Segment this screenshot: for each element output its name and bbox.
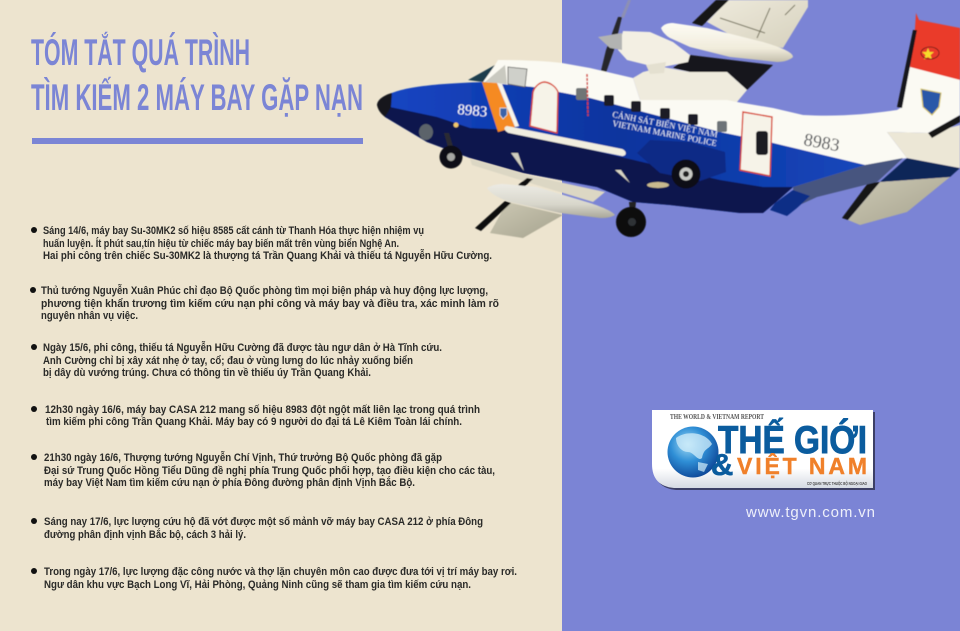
item: 17/6 divers deployed bbox=[31, 566, 517, 591]
background: blue panel bbox=[562, 0, 960, 631]
item: 15/6 pilot rescued bbox=[31, 341, 442, 379]
item: 17/6 divers deployed: Ngư dân khu vực Bạch Long Vĩ, Hải Phòng, Quảng Ninh cũng sẽ tham gia tìm kiếm cứu nạn. bbox=[44, 579, 471, 591]
item: 17/6 divers deployed: Trong ngày 17/6, lực lượng đặc công nước và thợ lặn chuyên môn cao được đưa tới vị trí máy bay rơi. bbox=[44, 566, 517, 578]
logo tagline: THE WORLD & VIETNAM REPORT bbox=[670, 414, 764, 421]
logo ampersand: & bbox=[711, 447, 733, 482]
orange nose stripe bbox=[482, 82, 519, 132]
item: 16/6 cooperation request bbox=[31, 451, 495, 489]
near wing fuel pod bbox=[487, 184, 615, 218]
item: 14/6 crash: huấn luyện. Ít phút sau,tín hiệu từ chiếc máy bay biến mất trên vùng biển Nghệ An. bbox=[43, 237, 399, 250]
cabin windows bbox=[576, 88, 727, 132]
tailplane lower bbox=[842, 177, 950, 225]
item: 17/6 wreckage found: Sáng nay 17/6, lực lượng cứu hộ đã vớt được một số mảnh vỡ máy bay CASA 212 ở phía Đông bbox=[44, 516, 483, 528]
fuselage lettering: VIETNAM MARINE POLICE bbox=[612, 118, 718, 148]
fuselage navy belly bbox=[385, 107, 793, 213]
fuselage blue body bbox=[377, 82, 865, 213]
item: Prime Minister directive: Thủ tướng Nguyễn Xuân Phúc chỉ đạo Bộ Quốc phòng tìm mọi biện pháp và huy động lực lượng, bbox=[41, 284, 488, 297]
item: 14/6 crash bbox=[31, 225, 492, 262]
front door bbox=[530, 82, 558, 133]
item: 16/6 cooperation request: Đại sứ Trung Quốc Hồng Tiểu Dũng đề nghị phía Trung Quốc phối hợp, tạo điều kiện cho các tàu, bbox=[44, 465, 495, 477]
logo small print: CƠ QUAN TRỰC THUỘC BỘ NGOẠI GIAO bbox=[807, 481, 867, 486]
rear gear wheel bbox=[616, 202, 646, 237]
main wheel bbox=[672, 160, 700, 188]
belly details bbox=[419, 122, 669, 188]
item: 16/6 CASA 212 lost bbox=[31, 404, 480, 428]
item: 16/6 CASA 212 lost: 12h30 ngày 16/6, máy bay CASA 212 mang số hiệu 8983 đột ngột mất liên lạc trong quá trình bbox=[45, 404, 480, 416]
near wing strip bbox=[470, 159, 605, 202]
timeline text block bbox=[30, 225, 517, 591]
rear underside bbox=[770, 158, 960, 216]
item: Prime Minister directive: phương tiện khẩn trương tìm kiếm cứu nạn phi công và máy bay và điều tra, xác minh làm rõ bbox=[41, 298, 499, 310]
rear door bbox=[740, 112, 772, 176]
title bbox=[31, 31, 363, 118]
photo: coast guard aircraft 8983 bbox=[377, 0, 960, 238]
item: Prime Minister directive bbox=[30, 284, 499, 322]
item: 15/6 pilot rescued: Anh Cường chỉ bị xây xát nhẹ ở tay, cổ; đau ở vùng lưng do lúc nhảy xuống biển bbox=[43, 355, 413, 367]
nose number 8983: 8983 bbox=[457, 102, 488, 121]
item: 16/6 cooperation request: máy bay Việt Nam tìm kiếm cứu nạn ở phía Đông đường phân định Vịnh Bắc Bộ. bbox=[44, 476, 415, 489]
far wing bbox=[633, 0, 808, 102]
title: TÓM TẮT QUÁ TRÌNH bbox=[31, 31, 250, 73]
logo plate bbox=[654, 412, 875, 490]
item: 15/6 pilot rescued: Ngày 15/6, phi công, thiếu tá Nguyễn Hữu Cường đã được tàu ngư dân ở Hà Tĩnh cứu. bbox=[43, 341, 442, 354]
red mast line bbox=[587, 74, 588, 116]
logo name: VIỆT NAM: VIỆT NAM bbox=[737, 452, 867, 479]
item: 17/6 wreckage found bbox=[31, 516, 483, 541]
item: 16/6 cooperation request: 21h30 ngày 16/6, Thượng tướng Nguyễn Chí Vịnh, Thứ trưởng Bộ Quốc phòng đã gặp bbox=[44, 451, 442, 464]
background: beige panel bbox=[0, 0, 562, 631]
nose wheel bbox=[440, 133, 462, 168]
title underline bar bbox=[32, 138, 363, 144]
near wing bbox=[475, 178, 563, 238]
logo: Thế Giới & Việt Nam bbox=[652, 410, 875, 490]
tailplane upper bbox=[887, 115, 960, 168]
item: 14/6 crash: Hai phi công trên chiếc Su-30MK2 là thượng tá Trần Quang Khải và thiếu tá Nguyễn Hữu Cường. bbox=[43, 249, 492, 262]
item: 17/6 wreckage found: đường phân định vịnh Bắc bộ, cách 3 hải lý. bbox=[44, 528, 246, 541]
cockpit windows bbox=[468, 65, 527, 87]
nose cap bbox=[377, 93, 392, 117]
far wing fuel pod bbox=[661, 23, 793, 62]
icon: globe bbox=[668, 426, 718, 478]
fuselage lettering: CẢNH SÁT BIỂN VIỆT NAM bbox=[612, 109, 719, 139]
landing gear sponson bbox=[637, 140, 726, 181]
website url: www.tgvn.com.vn bbox=[745, 504, 875, 521]
engine nacelle bbox=[598, 31, 690, 74]
item: 14/6 crash: Sáng 14/6, máy bay Su-30MK2 số hiệu 8585 cất cánh từ Thanh Hóa thực hiện nhiệm vụ bbox=[43, 225, 424, 237]
logo name: THẾ GIỚI: THẾ GIỚI bbox=[718, 418, 867, 462]
rear number 8983: 8983 bbox=[802, 129, 841, 155]
item: Prime Minister directive: nguyên nhân vụ việc. bbox=[41, 310, 138, 322]
item: 16/6 CASA 212 lost: tìm kiếm phi công Trần Quang Khải. Máy bay có 9 người do đại tá Lê Kiêm Toàn lái chính. bbox=[46, 416, 462, 428]
item: 15/6 pilot rescued: bị dây dù vướng trúng. Chưa có thông tin về thiếu úy Trần Quang Khải. bbox=[43, 367, 371, 379]
propeller bbox=[597, 0, 631, 87]
title: TÌM KIẾM 2 MÁY BAY GẶP NẠN bbox=[31, 77, 363, 118]
white side strip bbox=[505, 126, 626, 156]
fuselage white upper and fin bbox=[483, 28, 960, 165]
tail fin markings bbox=[897, 13, 960, 115]
